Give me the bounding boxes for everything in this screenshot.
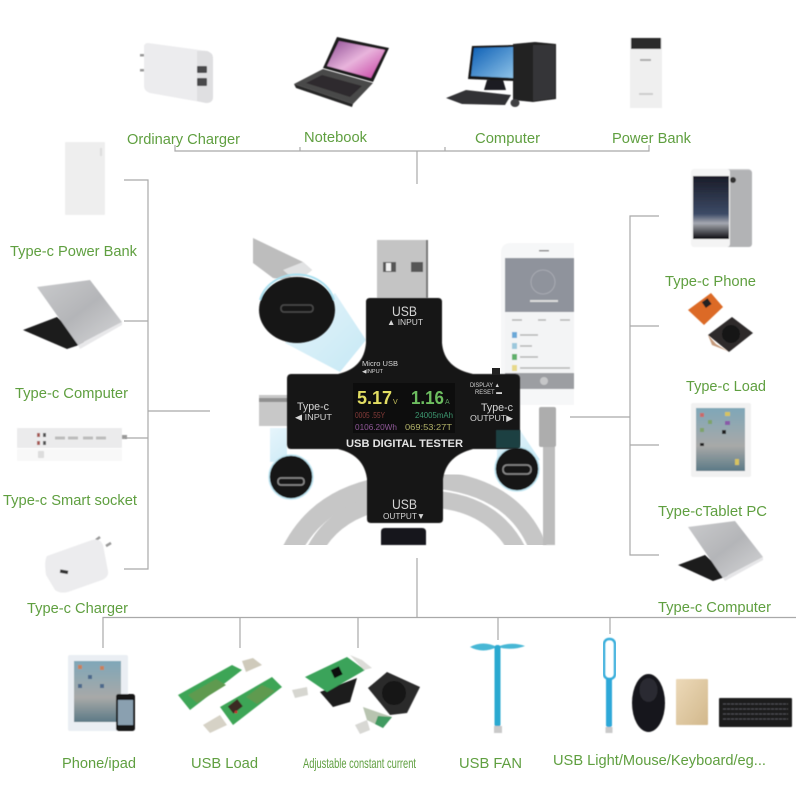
label: right column: Type-c Phone xyxy=(665,273,756,290)
magnifier bubble: micro usb port top xyxy=(259,275,335,343)
label: left column xyxy=(3,243,138,617)
tester printed labels: USB xyxy=(392,496,417,512)
right cable xyxy=(539,407,556,545)
icon: type-c phone xyxy=(691,169,752,247)
tester printed labels: DISPLAY ▲ xyxy=(470,383,500,389)
screen: 5.17 xyxy=(357,388,392,408)
teal corner reflection xyxy=(496,430,520,448)
tester printed labels: Type-c xyxy=(297,401,329,413)
phone xyxy=(501,243,574,405)
label: right column: Type-c Computer xyxy=(658,599,771,616)
screen: 069:53:27T xyxy=(405,423,452,432)
icon: type-c power bank xyxy=(65,142,105,215)
label: top row: Computer xyxy=(475,130,540,147)
icon: type-c computer laptop xyxy=(23,280,122,349)
icon: ordinary charger xyxy=(140,43,213,103)
label: right column: Type-cTablet PC xyxy=(658,503,767,520)
tester printed labels: OUTPUT▼ xyxy=(383,511,425,521)
label: right column: Type-c Load xyxy=(686,378,766,395)
tester printed labels: Type-c xyxy=(481,402,513,414)
tester printed labels: ◀ INPUT xyxy=(295,412,332,422)
icon: usb load boards xyxy=(178,658,282,733)
tester printed labels: OUTPUT▶ xyxy=(470,413,513,423)
icon: gold power bank xyxy=(676,679,708,725)
label: bottom row: USB Light/Mouse/Keyboard/eg... xyxy=(553,752,766,769)
screen xyxy=(353,383,455,433)
label: top row: Power Bank xyxy=(612,130,691,147)
screen: V xyxy=(393,399,398,406)
type-c plug left xyxy=(259,395,289,426)
tester printed labels: ◀INPUT xyxy=(362,369,383,375)
icon: ipad and iphone xyxy=(68,655,135,731)
label: top row: Ordinary Charger xyxy=(127,131,240,148)
icon: smart socket xyxy=(17,428,127,461)
icon: notebook xyxy=(294,37,389,107)
icon: keyboard xyxy=(719,698,792,727)
icon: type-c computer laptop right xyxy=(678,521,763,581)
top micro usb cable xyxy=(253,238,312,282)
label: bottom row xyxy=(62,752,766,772)
label: bottom row: USB FAN xyxy=(459,755,522,772)
connector lines xyxy=(103,145,796,648)
tester body xyxy=(287,298,520,523)
label: bottom row: Phone/ipad xyxy=(62,755,136,772)
usb plug bottom xyxy=(381,528,426,545)
label: bottom row: Adjustable constant current xyxy=(303,755,416,771)
screen: 0106.20Wh xyxy=(355,423,397,432)
label: right column xyxy=(658,273,771,616)
screen: 1.16 xyxy=(411,388,444,408)
label: bottom row: USB Load xyxy=(191,755,258,772)
display switch xyxy=(492,368,500,375)
tester printed labels: Micro USB xyxy=(362,359,398,368)
light-blue magnifier beams xyxy=(270,293,540,462)
grey cable coils xyxy=(283,474,546,545)
icon: type-c load boards xyxy=(688,293,753,352)
label: top row xyxy=(127,129,691,148)
tester printed labels: RESET ▬ xyxy=(475,390,502,396)
usb plug top xyxy=(377,240,428,298)
icon: desktop computer xyxy=(446,42,556,107)
icon: type-c tablet xyxy=(691,403,751,477)
screen: A xyxy=(445,399,450,406)
central tester illustration xyxy=(253,238,574,560)
tester printed labels: USB DIGITAL TESTER xyxy=(346,438,463,450)
label: left column: Type-c Computer xyxy=(15,385,128,402)
icon: usb light xyxy=(604,639,615,733)
magnifier bubble: right port xyxy=(495,447,539,491)
icon: mouse xyxy=(632,674,665,732)
icon: type-c charger xyxy=(45,537,111,593)
icon: power bank xyxy=(630,38,662,108)
magnifier bubble: left port xyxy=(269,455,313,499)
label: left column: Type-c Power Bank xyxy=(10,243,137,260)
tester printed labels: USB xyxy=(392,303,417,319)
icon: usb fan xyxy=(470,644,525,733)
icon: adjustable constant current load xyxy=(292,655,420,734)
label: top row: Notebook xyxy=(304,129,367,146)
screen: 24005mAh xyxy=(415,411,453,420)
tester printed labels: ▲ INPUT xyxy=(387,317,423,327)
tester printed labels xyxy=(295,303,513,521)
label: left column: Type-c Charger xyxy=(27,600,128,617)
screen: 0005 .55Y xyxy=(355,411,386,420)
label: left column: Type-c Smart socket xyxy=(3,492,138,509)
